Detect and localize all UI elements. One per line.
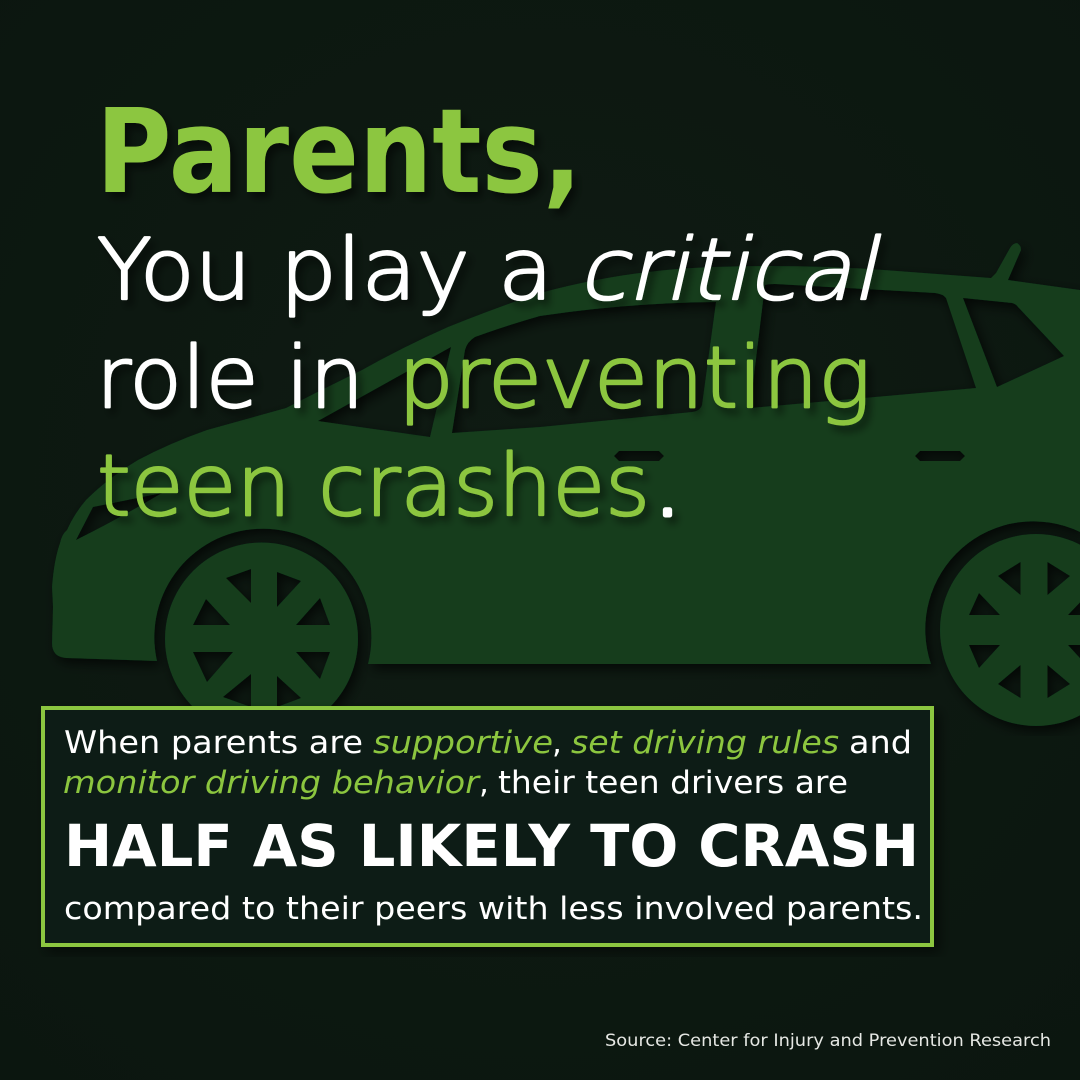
callout line 2: , — [479, 765, 489, 801]
rear wheel — [940, 534, 1080, 726]
heading word: preventing: preventing — [398, 329, 871, 428]
callout line 1: set driving rules — [571, 725, 839, 761]
callout line 1: When parents are — [64, 725, 363, 761]
heading line: role in: role in — [96, 329, 364, 428]
callout line 2 — [63, 765, 848, 801]
headline — [96, 83, 894, 536]
callout line 1 — [64, 725, 912, 761]
callout line 2: monitor driving behavior — [63, 765, 481, 801]
callout line 2: their teen drivers are — [498, 765, 848, 801]
callout line 1: and — [849, 725, 912, 761]
callout line 1: , — [552, 725, 562, 761]
callout line 4: compared to their peers with less involved parents. — [64, 891, 923, 927]
callout frame — [43, 708, 932, 945]
front wheel — [165, 542, 358, 736]
heading period: . — [654, 437, 681, 536]
source note: Source: Center for Injury and Prevention Research — [605, 1031, 1051, 1051]
heading line: teen crashes: teen crashes — [97, 437, 650, 536]
heading line: You play a: You play a — [97, 221, 553, 320]
heading word: critical: critical — [573, 221, 894, 320]
callout line 1: supportive — [373, 725, 553, 761]
heading: Parents,: Parents, — [96, 83, 582, 220]
car body with windows and door handles — [52, 243, 1080, 664]
car silhouette — [52, 243, 1080, 736]
callout emphasis: HALF AS LIKELY TO CRASH — [64, 812, 919, 880]
callout box — [43, 708, 932, 945]
